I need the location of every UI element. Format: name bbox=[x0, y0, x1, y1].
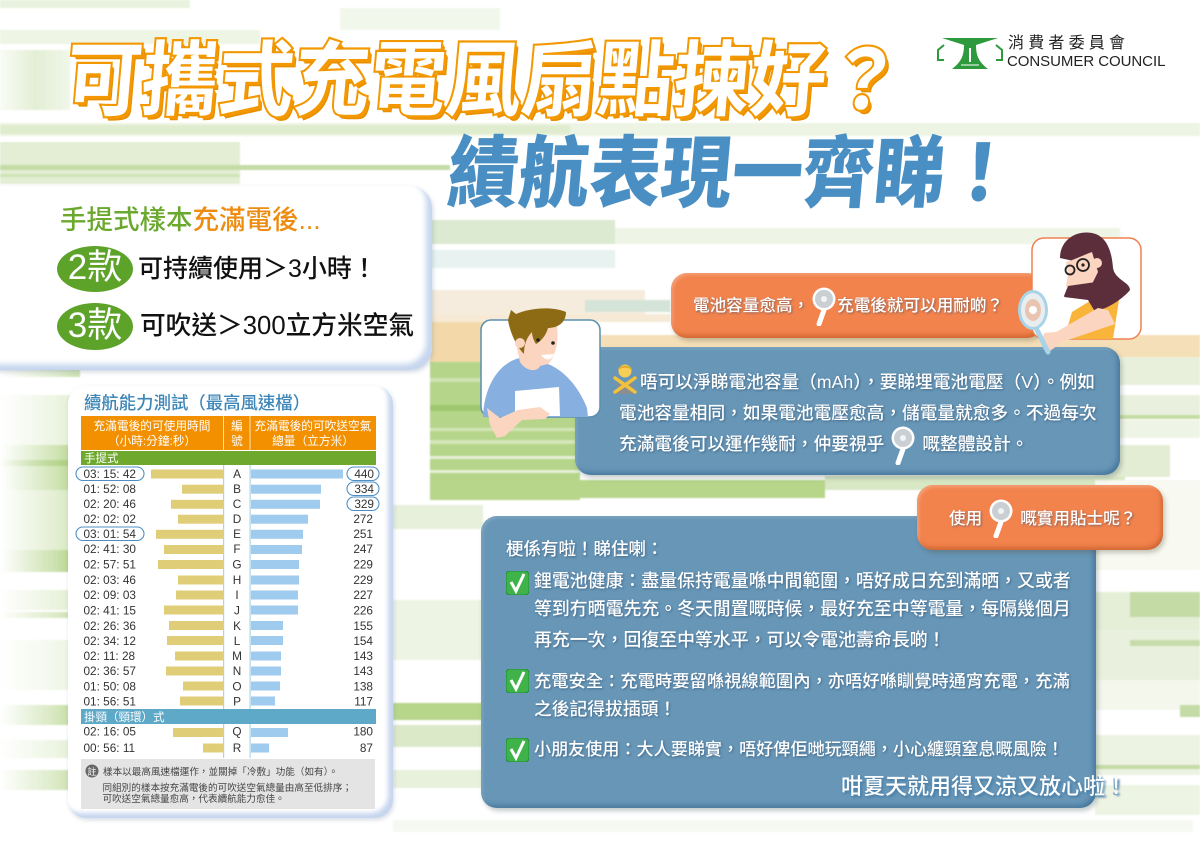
runtime values: 02: 41: 15 bbox=[84, 604, 136, 618]
title line 2: 績航表現一齊睇！ bbox=[444, 131, 1020, 218]
badge: 2 models bbox=[57, 246, 133, 292]
title line 1: 可攜式充電風扇點揀好？ bbox=[62, 36, 906, 127]
air volume values: 334 bbox=[354, 482, 374, 496]
tip text: children: 小朋友使用：大人要睇實，唔好俾佢哋玩頸繩，小心纏頸窒息嘅風險！ bbox=[534, 740, 1064, 759]
air volume values: 229 bbox=[353, 573, 373, 587]
battery runtime bars bbox=[151, 470, 223, 752]
answer text: 唔可以淨睇電池容量（mAh），要睇埋電池電壓（V）。例如 bbox=[640, 372, 1095, 392]
tip: battery health: 等到冇晒電先充。冬天閒置嘅時候，最好充至中等電量，每隔幾個月 bbox=[534, 599, 1071, 619]
tip text: battery health: 鋰電池健康：盡量保持電量喺中間範圍，唔好成日充到滿晒，又或者 bbox=[534, 571, 1071, 591]
model codes bbox=[232, 467, 242, 755]
stat: over 300 cubic metres: 可吹送＞300立方米空氣 bbox=[140, 312, 414, 340]
model codes: F bbox=[233, 542, 241, 556]
icon: check bbox=[506, 571, 529, 595]
speech bubble: question 2 bbox=[917, 485, 1163, 550]
table note: 同組別的樣本按充滿電後的可吹送空氣總量由高至低排序； bbox=[102, 782, 352, 794]
model codes: K bbox=[233, 619, 241, 633]
model codes: M bbox=[232, 649, 242, 663]
air volume values: 251 bbox=[353, 527, 373, 541]
air volume values: 117 bbox=[354, 694, 373, 708]
table header: （小時:分鐘:秒） bbox=[108, 434, 196, 448]
question 1 text: 電池容量愈高， 充電後就可以用耐啲？ bbox=[693, 296, 1003, 315]
icon: check bbox=[506, 738, 529, 762]
logo: Consumer Council bbox=[937, 34, 1165, 70]
panel: answer on battery: 充滿電後可以運作幾耐，仲要視乎 嘅整體設計。 bbox=[619, 434, 1028, 454]
question 2 text: 使用 嘅實用貼士呢？ bbox=[949, 509, 1136, 528]
air volume values: 247 bbox=[353, 542, 373, 556]
air volume values: 227 bbox=[353, 588, 373, 602]
avatar: man bbox=[480, 308, 601, 438]
panel: endurance test table bbox=[68, 386, 393, 818]
table header: 充滿電後的可使用時間 bbox=[94, 419, 210, 433]
runtime values: 01: 56: 51 bbox=[84, 694, 136, 708]
table header: 號 bbox=[231, 435, 243, 448]
model codes: B bbox=[233, 482, 241, 496]
tips intro: 梗係有啦！睇住喇： bbox=[506, 539, 664, 559]
icon: fan bbox=[892, 426, 914, 465]
model codes: O bbox=[232, 680, 242, 694]
runtime values: 00: 56: 11 bbox=[84, 741, 135, 755]
axis lines bbox=[223, 465, 251, 758]
model codes: H bbox=[233, 573, 241, 587]
speech bubble: question 1 bbox=[671, 273, 1043, 338]
tip: charging safety: 之後記得拔插頭！ bbox=[534, 699, 676, 719]
icon: crossed arms emoji bbox=[613, 364, 637, 394]
tip: battery health bbox=[506, 571, 1072, 650]
air volume values: 440 bbox=[354, 467, 374, 481]
model codes: E bbox=[233, 527, 241, 541]
table note: 註 bbox=[87, 766, 97, 777]
avatar: woman with fan bbox=[1018, 232, 1142, 354]
air volume values: 226 bbox=[353, 604, 373, 618]
tip: children bbox=[506, 738, 1064, 762]
panel: usage tips bbox=[481, 516, 1096, 808]
runtime values: 02: 36: 57 bbox=[84, 664, 136, 678]
air volume values: 272 bbox=[353, 512, 373, 526]
section bar: neck: 掛頸（頸環）式 bbox=[84, 710, 165, 724]
air volume bars bbox=[251, 470, 343, 752]
table note: 樣本以最高風速檔運作，並關掉「冷敷」功能（如有）。 bbox=[103, 766, 338, 778]
runtime values: 03: 01: 54 bbox=[84, 527, 136, 541]
runtime values: 02: 57: 51 bbox=[84, 558, 136, 572]
runtime values: 02: 41: 30 bbox=[84, 542, 136, 556]
heading: after full charge: 手提式樣本充滿電後... bbox=[60, 205, 321, 235]
closing line: 咁夏天就用得又涼又放心啦！ bbox=[841, 774, 1127, 799]
model codes: L bbox=[234, 634, 241, 648]
icon: check bbox=[506, 669, 529, 693]
air volume values: 180 bbox=[353, 724, 373, 738]
model codes: C bbox=[233, 497, 242, 511]
panel: answer on battery: 電池容量相同，如果電池電壓愈高，儲電量就愈多。不過每次 bbox=[619, 403, 1097, 423]
model codes: A bbox=[233, 467, 241, 481]
table header: 總量（立方米） bbox=[272, 434, 354, 448]
section bar: neck bbox=[81, 709, 376, 724]
badge: 3 models bbox=[57, 303, 133, 350]
runtime values: 02: 03: 46 bbox=[84, 573, 136, 587]
air volume values: 154 bbox=[353, 634, 373, 648]
runtime values: 02: 09: 03 bbox=[84, 588, 136, 602]
runtime values: 02: 02: 02 bbox=[84, 512, 136, 526]
air volume values: 329 bbox=[354, 497, 374, 511]
model codes: J bbox=[234, 604, 240, 618]
highlight pills bbox=[76, 467, 379, 540]
table note bbox=[81, 759, 375, 809]
runtime values: 02: 16: 05 bbox=[84, 724, 136, 738]
logo: Consumer Council: 消費者委員會 bbox=[1008, 35, 1129, 52]
badge: 3 models: 3款 bbox=[68, 306, 122, 345]
icon: fan bbox=[990, 500, 1012, 538]
model codes: P bbox=[233, 694, 241, 708]
stat: runtime over 3 hours: 可持續使用＞3小時！ bbox=[138, 255, 377, 283]
runtime values: 02: 26: 36 bbox=[84, 619, 136, 633]
tip: battery health: 再充一次，回復至中等水平，可以令電池壽命長啲！ bbox=[534, 630, 946, 650]
air volume values: 229 bbox=[353, 558, 373, 572]
air volume values: 143 bbox=[353, 664, 373, 678]
panel: answer on battery bbox=[575, 347, 1120, 475]
model codes: Q bbox=[232, 724, 242, 738]
model codes: D bbox=[233, 512, 241, 526]
table header: 充滿電後的可吹送空氣 bbox=[255, 419, 372, 433]
table heading: 續航能力測試（最高風速檔） bbox=[84, 393, 310, 413]
runtime values bbox=[84, 467, 136, 755]
model codes: G bbox=[232, 558, 242, 572]
runtime values: 02: 11: 28 bbox=[84, 649, 136, 663]
table note: 可吹送空氣總量愈高，代表續航能力愈佳。 bbox=[102, 793, 285, 805]
air volume values: 143 bbox=[353, 649, 373, 663]
tip: charging safety bbox=[506, 669, 1070, 719]
section bar: handheld bbox=[81, 451, 376, 465]
table header: 編 bbox=[231, 420, 243, 433]
air volume values bbox=[353, 467, 374, 755]
panel: key findings bbox=[0, 186, 432, 370]
air volume values: 155 bbox=[353, 619, 373, 633]
air volume values: 138 bbox=[353, 680, 373, 694]
logo: Consumer Council: CONSUMER COUNCIL bbox=[1007, 53, 1165, 70]
tip text: charging safety: 充電安全：充電時要留喺視線範圍內，亦唔好喺瞓覺時通宵充電，充滿 bbox=[534, 671, 1070, 691]
section bar: handheld: 手提式 bbox=[84, 451, 119, 465]
air volume values: 87 bbox=[360, 741, 373, 755]
runtime values: 03: 15: 42 bbox=[84, 467, 136, 481]
runtime values: 01: 50: 08 bbox=[84, 680, 136, 694]
runtime values: 02: 20: 46 bbox=[84, 497, 136, 511]
model codes: N bbox=[233, 664, 241, 678]
model codes: I bbox=[235, 588, 239, 602]
badge: 2 models: 2款 bbox=[68, 248, 122, 287]
icon: fan bbox=[812, 288, 836, 326]
runtime values: 02: 34: 12 bbox=[84, 634, 136, 648]
table header bbox=[81, 416, 376, 450]
runtime values: 01: 52: 08 bbox=[84, 482, 136, 496]
model codes: R bbox=[233, 741, 241, 755]
